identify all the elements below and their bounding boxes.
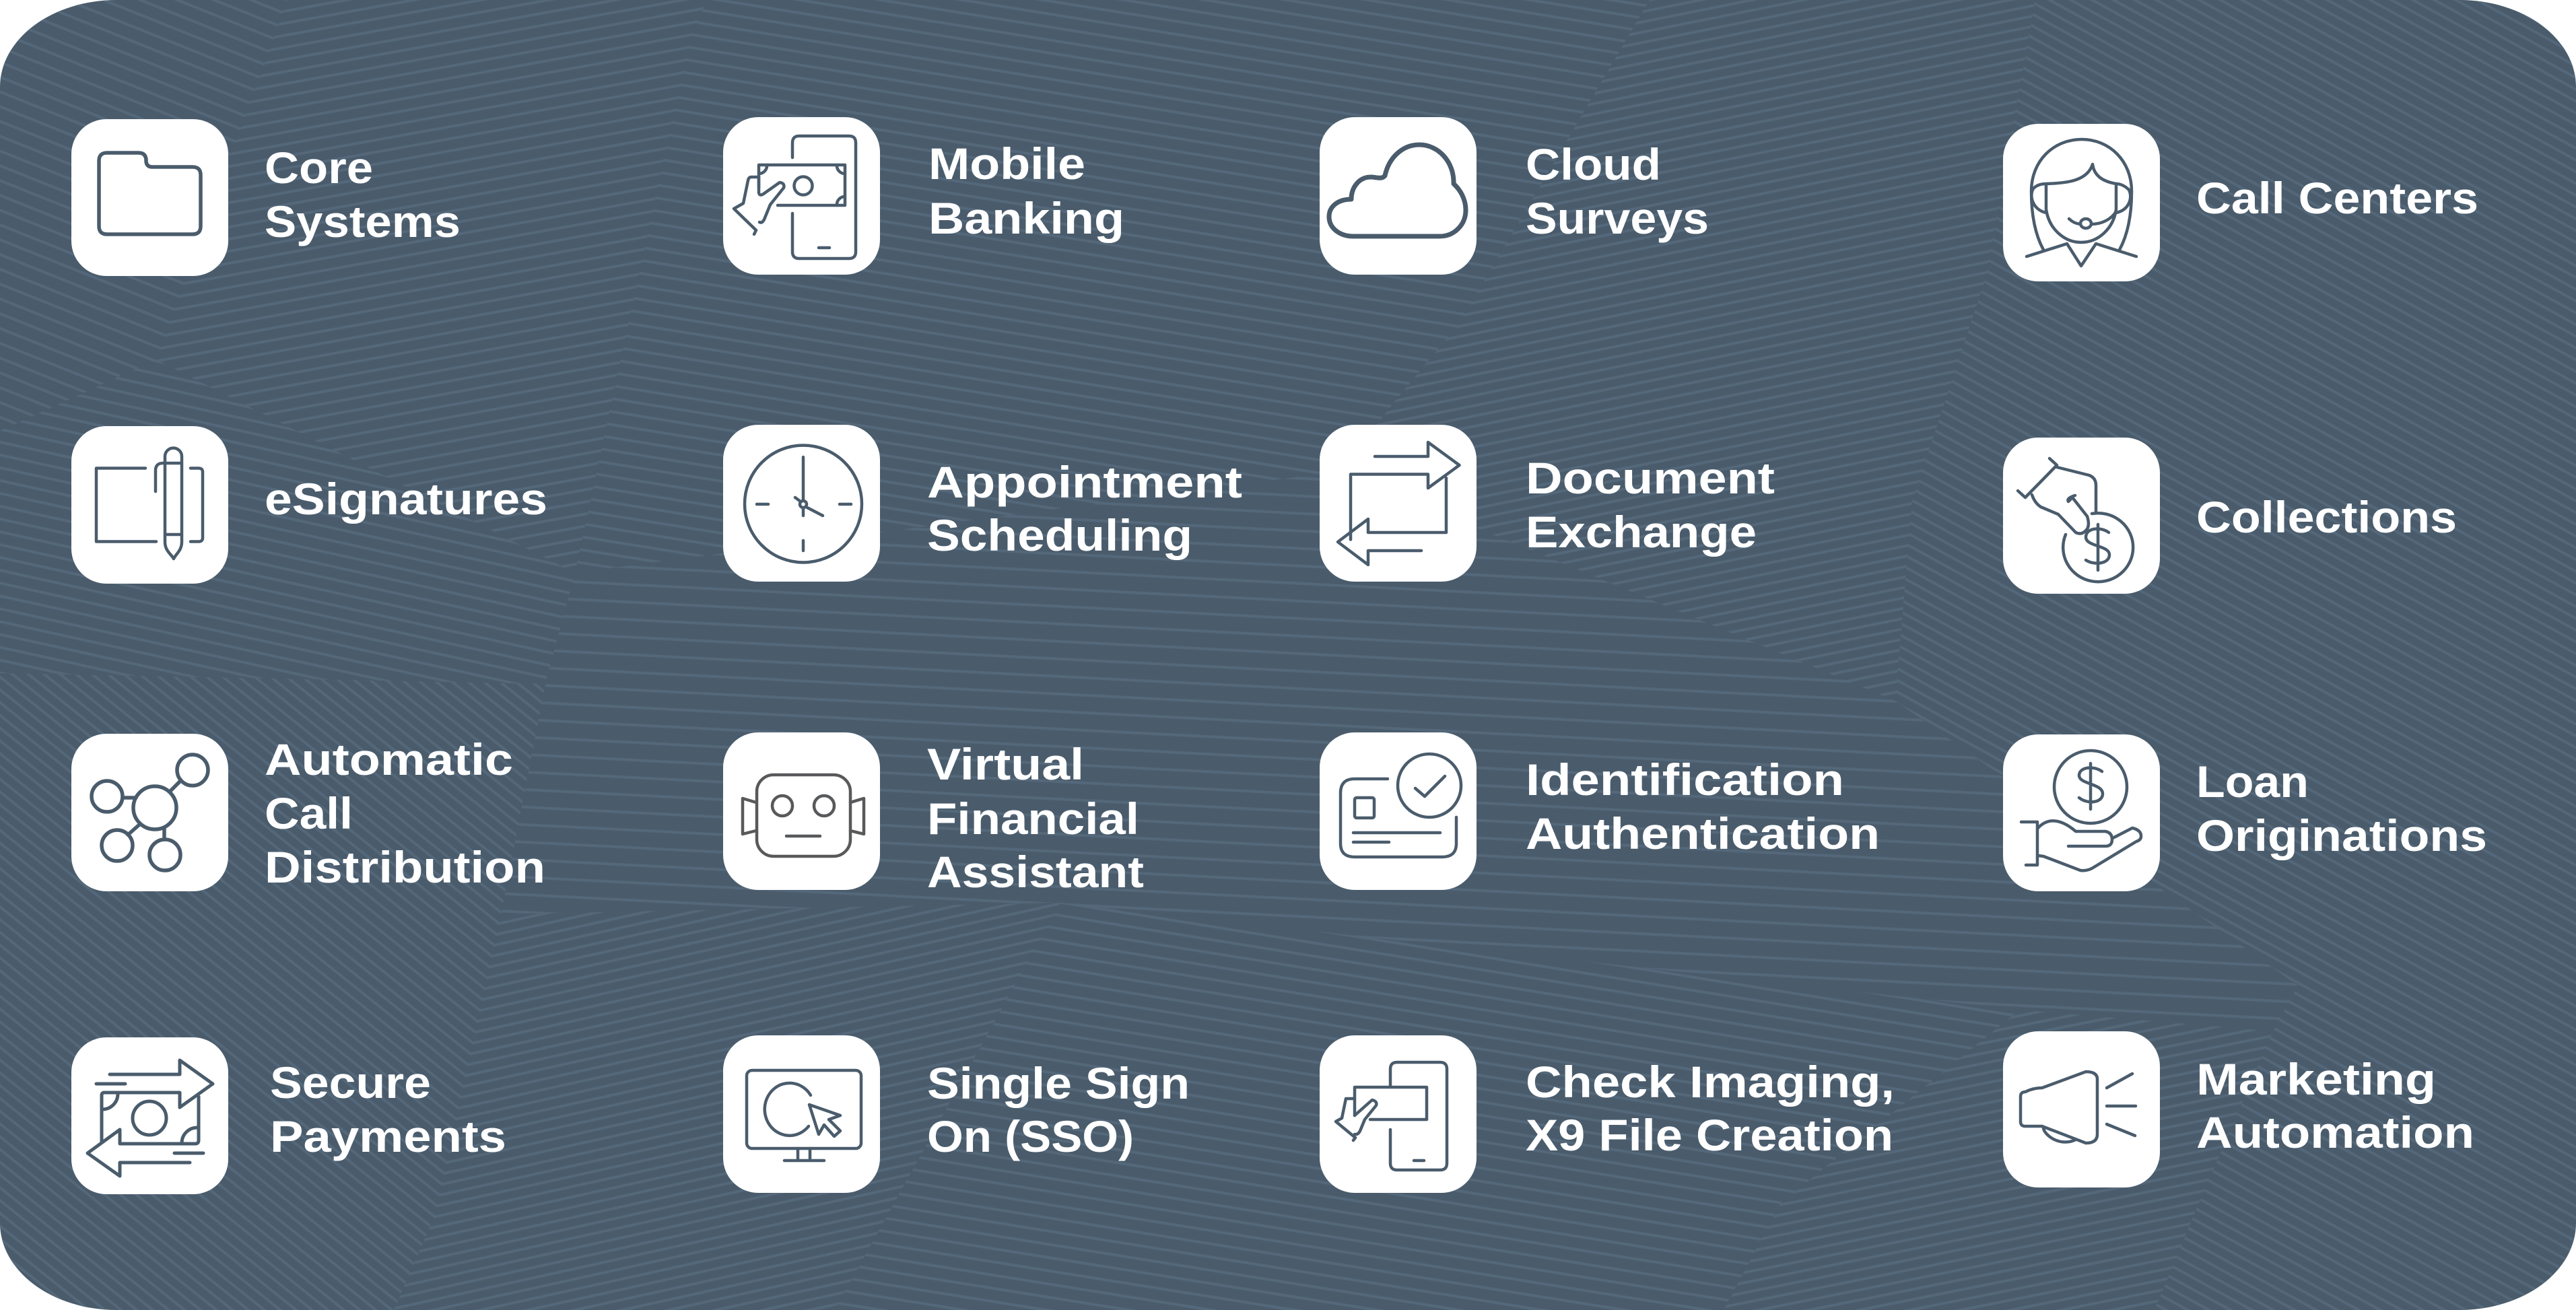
label: Secure Payments: Secure [270, 1058, 431, 1107]
card: Single Sign On (SSO) [723, 1035, 1190, 1193]
label: Mobile Banking: Banking [928, 193, 1124, 243]
label: Check Imaging, X9 File Creation [1526, 1057, 1895, 1160]
icon: hand holding coin [2003, 734, 2160, 891]
card: Identification Authentication [1320, 732, 1880, 890]
card: Collections [2003, 438, 2457, 594]
card: Core Systems [71, 119, 461, 276]
label: Core Systems: Core [265, 143, 373, 193]
label: Secure Payments: Payments [270, 1111, 506, 1161]
label: Virtual Financial Assistant [927, 739, 1144, 897]
icon: money exchange arrows [71, 1037, 228, 1194]
label: Document Exchange [1526, 453, 1775, 557]
icon: network nodes [71, 734, 228, 891]
label: Appointment Scheduling: Scheduling [927, 510, 1192, 560]
label: Automatic Call Distribution: Call [265, 788, 353, 838]
label: Marketing Automation: Marketing [2196, 1054, 2436, 1104]
card: Check Imaging, X9 File Creation [1320, 1035, 1895, 1193]
label: Automatic Call Distribution: Distribution [265, 842, 545, 892]
icon: cloud [1320, 117, 1477, 275]
icon: megaphone [2003, 1031, 2160, 1187]
icon: exchange arrows [1320, 425, 1477, 582]
label: Check Imaging, X9 File Creation: Check Imaging, [1526, 1057, 1895, 1107]
label: Mobile Banking: Mobile [928, 139, 1085, 188]
label: Identification Authentication: Identification [1526, 755, 1844, 804]
label: Marketing Automation: Automation [2196, 1107, 2474, 1157]
label: Secure Payments [270, 1058, 506, 1161]
icon: phone with cash [723, 117, 880, 275]
label: Loan Originations: Loan [2196, 757, 2309, 806]
label: Core Systems [265, 143, 461, 246]
card: Marketing Automation [2003, 1031, 2474, 1187]
label: Core Systems: Systems [265, 197, 461, 246]
label: Virtual Financial Assistant: Financial [927, 794, 1139, 843]
card: Automatic Call Distribution [71, 734, 545, 892]
icon: call center agent [2003, 124, 2160, 281]
label: Automatic Call Distribution: Automatic [265, 734, 513, 784]
icon: ID card with check [1320, 732, 1477, 890]
card: Document Exchange [1320, 425, 1775, 582]
label: Identification Authentication: Authentication [1526, 808, 1880, 858]
card: Virtual Financial Assistant [723, 732, 1144, 897]
label: Loan Originations [2196, 757, 2487, 860]
icon: robot head [723, 732, 880, 890]
label: Call Centers: Call Centers [2196, 173, 2478, 223]
label: Cloud Surveys: Cloud [1526, 139, 1661, 189]
label: Check Imaging, X9 File Creation: X9 File Creation [1526, 1110, 1893, 1160]
icon: phone with check [1320, 1035, 1477, 1193]
label: Marketing Automation [2196, 1054, 2474, 1157]
label: eSignatures: eSignatures [265, 474, 547, 524]
icon: folder [71, 119, 228, 276]
label: Mobile Banking [928, 139, 1124, 243]
label: Virtual Financial Assistant: Assistant [927, 847, 1144, 897]
label: Automatic Call Distribution [265, 734, 545, 892]
icon: clock [723, 425, 880, 582]
icon: pen and signature pad [71, 426, 228, 584]
card: eSignatures [71, 426, 547, 584]
label: Appointment Scheduling: Appointment [927, 457, 1242, 507]
icon: hand and coin [2003, 438, 2160, 594]
label: Single Sign On (SSO): Single Sign [927, 1058, 1190, 1108]
label: Single Sign On (SSO) [927, 1058, 1190, 1161]
card: Cloud Surveys [1320, 117, 1709, 275]
label: Appointment Scheduling [927, 457, 1242, 560]
card: Mobile Banking [723, 117, 1124, 275]
label: Cloud Surveys [1526, 139, 1709, 243]
label: Collections: Collections [2196, 492, 2457, 542]
label: Document Exchange: Exchange [1526, 507, 1757, 557]
icon: monitor with cursor [723, 1035, 880, 1193]
card: Loan Originations [2003, 734, 2487, 891]
label: Loan Originations: Originations [2196, 811, 2487, 860]
card: Call Centers [2003, 124, 2478, 281]
label: Identification Authentication [1526, 755, 1880, 858]
card: Secure Payments [71, 1037, 506, 1194]
label: Single Sign On (SSO): On (SSO) [927, 1111, 1134, 1161]
card: Appointment Scheduling [723, 425, 1242, 582]
label: Virtual Financial Assistant: Virtual [927, 739, 1084, 789]
label: Cloud Surveys: Surveys [1526, 193, 1709, 243]
label: Document Exchange: Document [1526, 453, 1775, 503]
